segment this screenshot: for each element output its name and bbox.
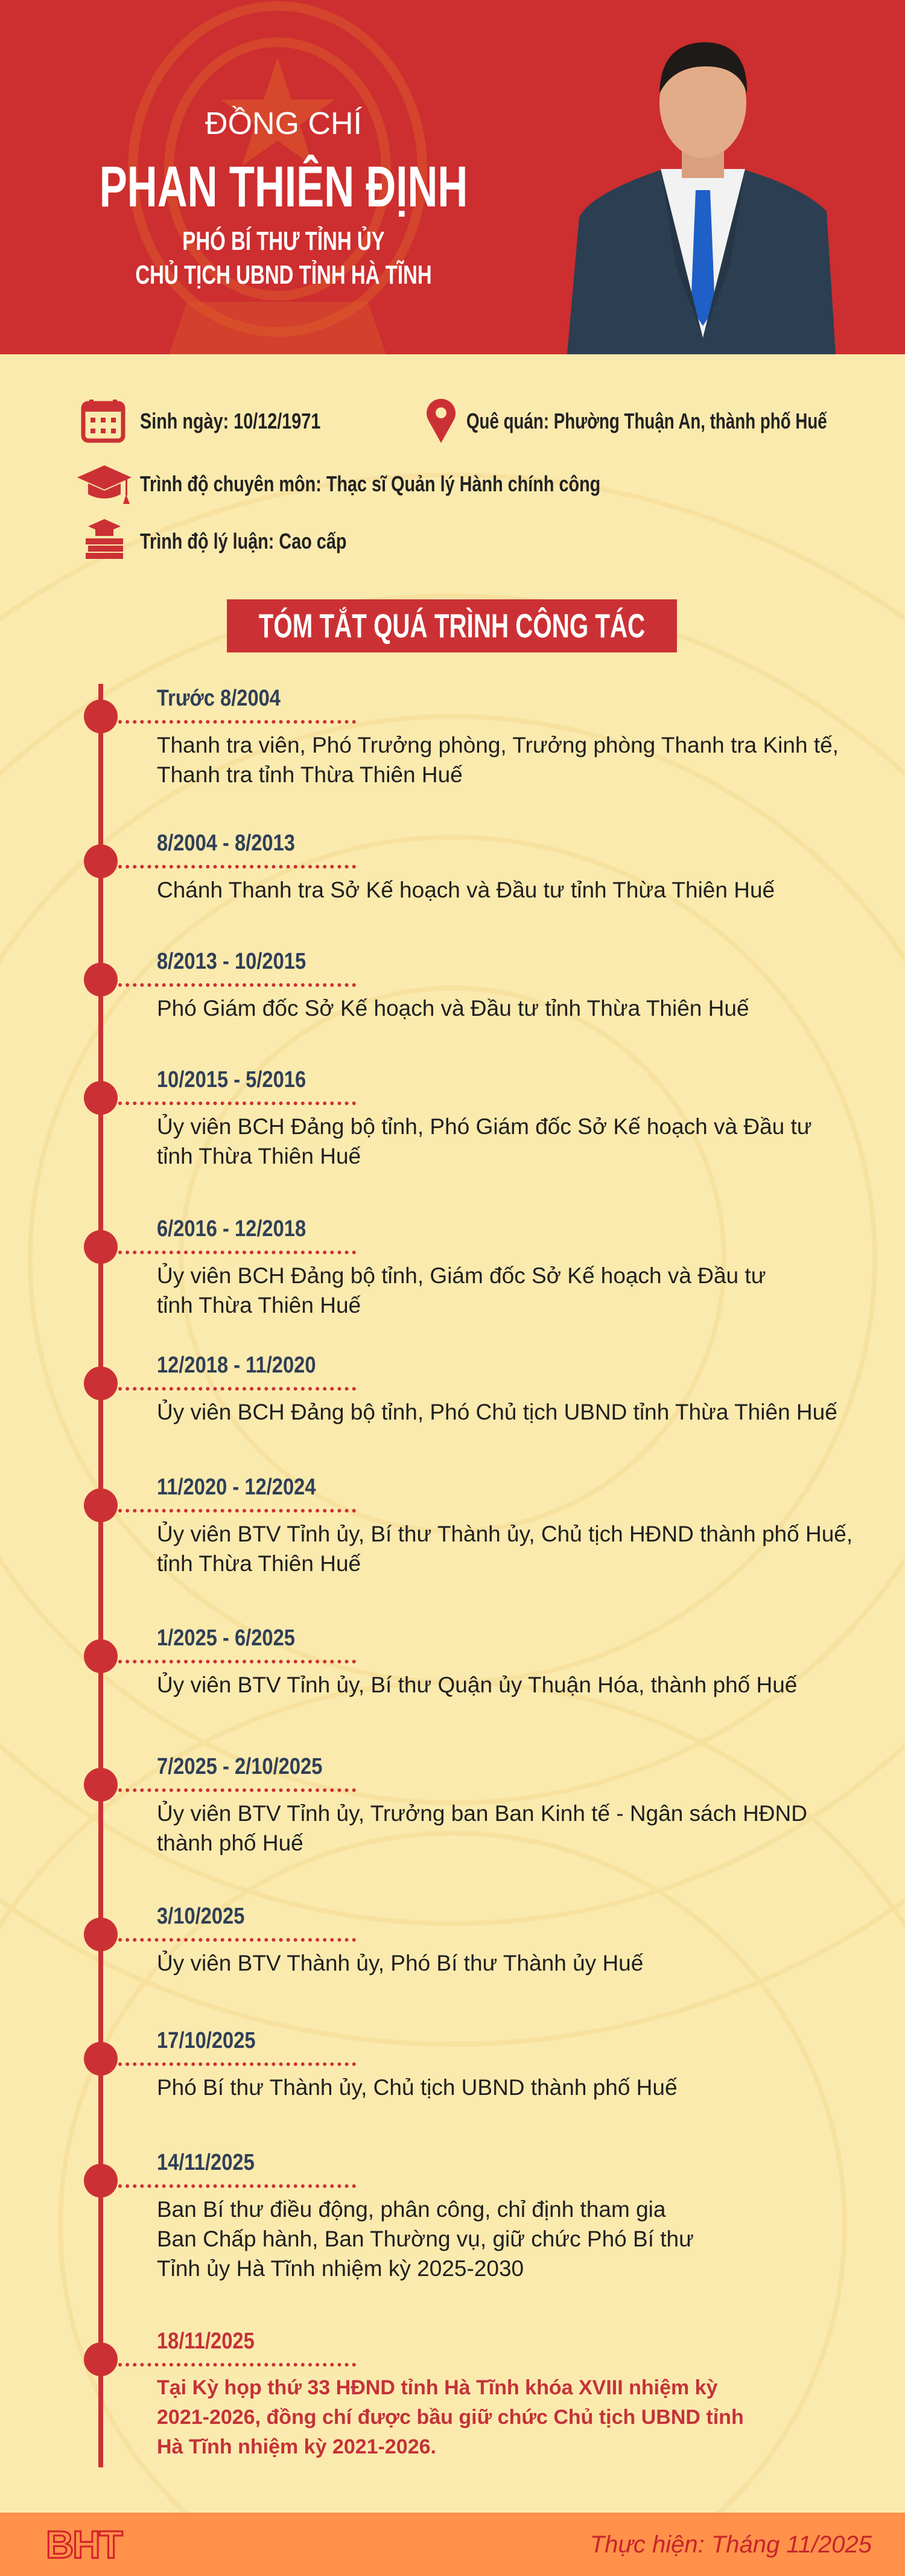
icon: calendar [81, 400, 125, 443]
info: education [77, 465, 600, 504]
item 13: Tại Kỳ họp thứ 33 HĐND tỉnh Hà Tĩnh khóa XVIII nhiệm kỳ [157, 2376, 718, 2399]
item 5: 6/2016 - 12/2018 [157, 1216, 306, 1242]
timeline line [98, 684, 103, 2467]
item 3: 8/2013 - 10/2015 [157, 949, 306, 974]
item 3: Phó Giám đốc Sở Kế hoạch và Đầu tư tỉnh Thừa Thiên Huế [157, 996, 749, 1021]
item 7: Ủy viên BTV Tỉnh ủy, Bí thư Thành ủy, Chủ tịch HĐND thành phố Huế, [157, 1522, 853, 1546]
item 12: Tỉnh ủy Hà Tĩnh nhiệm kỳ 2025-2030 [157, 2256, 524, 2281]
item 9: thành phố Huế [157, 1831, 303, 1855]
item 7 [84, 1475, 853, 1576]
emblem watermark [128, 1, 427, 354]
subtitle [135, 226, 432, 290]
item 13 [84, 2329, 744, 2458]
item 13: Hà Tĩnh nhiệm kỳ 2021-2026. [157, 2435, 436, 2458]
item 5 [84, 1216, 766, 1318]
item 4: 10/2015 - 5/2016 [157, 1067, 306, 1092]
item 11: Phó Bí thư Thành ủy, Chủ tịch UBND thành phố Huế [157, 2075, 678, 2100]
subtitle: PHÓ BÍ THƯ TỈNH ỦY [182, 226, 385, 256]
credit: Thực hiện: Tháng 11/2025 [590, 2531, 872, 2558]
section banner: TÓM TẮT QUÁ TRÌNH CÔNG TÁC [259, 607, 645, 645]
item 7: 11/2020 - 12/2024 [157, 1475, 316, 1500]
item 10: 3/10/2025 [157, 1904, 244, 1929]
header band [0, 0, 905, 354]
item 4 [84, 1067, 812, 1168]
item 12: Ban Bí thư điều động, phân công, chỉ định tham gia [157, 2197, 665, 2222]
logo: BHT: BHT [46, 2523, 122, 2566]
item 12: 14/11/2025 [157, 2150, 255, 2175]
info: education: Trình độ chuyên môn: Thạc sĩ Quản lý Hành chính công [140, 471, 600, 496]
item 8: 1/2025 - 6/2025 [157, 1625, 295, 1651]
item 1: Trước 8/2004 [157, 686, 281, 711]
icon: books [86, 519, 123, 559]
item 9: Ủy viên BTV Tỉnh ủy, Trưởng ban Ban Kinh tế - Ngân sách HĐND [157, 1801, 807, 1826]
info: hometown: Quê quán: Phường Thuận An, thành phố Huế [466, 409, 827, 433]
item 1: Thanh tra viên, Phó Trưởng phòng, Trưởng phòng Thanh tra Kinh tế, [157, 733, 839, 757]
item 3 [84, 949, 749, 1021]
info: birth: Sinh ngày: 10/12/1971 [140, 409, 320, 433]
item 2 [84, 831, 775, 902]
item 8 [84, 1625, 797, 1697]
item 4: Ủy viên BCH Đảng bộ tỉnh, Phó Giám đốc Sở Kế hoạch và Đầu tư [157, 1114, 812, 1139]
item 13: 2021-2026, đồng chí được bầu giữ chức Chủ tịch UBND tỉnh [157, 2406, 744, 2429]
item 2: Chánh Thanh tra Sở Kế hoạch và Đầu tư tỉnh Thừa Thiên Huế [157, 878, 775, 902]
item 11: 17/10/2025 [157, 2028, 256, 2053]
portrait [567, 42, 836, 354]
item 6: Ủy viên BCH Đảng bộ tỉnh, Phó Chủ tịch UBND tỉnh Thừa Thiên Huế [157, 1400, 837, 1424]
item 9: 7/2025 - 2/10/2025 [157, 1754, 322, 1779]
item 11 [84, 2028, 678, 2100]
item 6: 12/2018 - 11/2020 [157, 1353, 316, 1378]
title: name: PHAN THIÊN ĐỊNH [100, 155, 468, 219]
icon: location pin [427, 398, 456, 443]
subtitle: CHỦ TỊCH UBND TỈNH HÀ TĨNH [135, 260, 432, 290]
item 1: Thanh tra tỉnh Thừa Thiên Huế [157, 762, 463, 787]
item 1 [84, 686, 839, 787]
footer [0, 2513, 905, 2576]
item 12: Ban Chấp hành, Ban Thường vụ, giữ chức Phó Bí thư [157, 2227, 694, 2251]
info: birth [81, 400, 320, 443]
item 5: Ủy viên BCH Đảng bộ tỉnh, Giám đốc Sở Kế hoạch và Đầu tư [157, 1263, 766, 1288]
info: hometown [427, 398, 827, 443]
info: political theory: Trình độ lý luận: Cao cấp [140, 529, 346, 553]
item 12 [84, 2150, 694, 2281]
info: political theory [86, 519, 346, 559]
section banner [227, 599, 677, 652]
item 7: tỉnh Thừa Thiên Huế [157, 1551, 361, 1576]
item 10 [84, 1904, 643, 1975]
item 5: tỉnh Thừa Thiên Huế [157, 1293, 361, 1318]
item 10: Ủy viên BTV Thành ủy, Phó Bí thư Thành ủy Huế [157, 1951, 643, 1975]
item 8: Ủy viên BTV Tỉnh ủy, Bí thư Quận ủy Thuận Hóa, thành phố Huế [157, 1672, 797, 1697]
item 9 [84, 1754, 807, 1855]
item 2: 8/2004 - 8/2013 [157, 831, 295, 856]
item 6 [84, 1353, 837, 1424]
item 13: 18/11/2025 [157, 2329, 255, 2354]
title: đồng chí: ĐỒNG CHÍ [205, 106, 362, 141]
item 4: tỉnh Thừa Thiên Huế [157, 1144, 361, 1168]
icon: graduation cap [77, 465, 132, 504]
